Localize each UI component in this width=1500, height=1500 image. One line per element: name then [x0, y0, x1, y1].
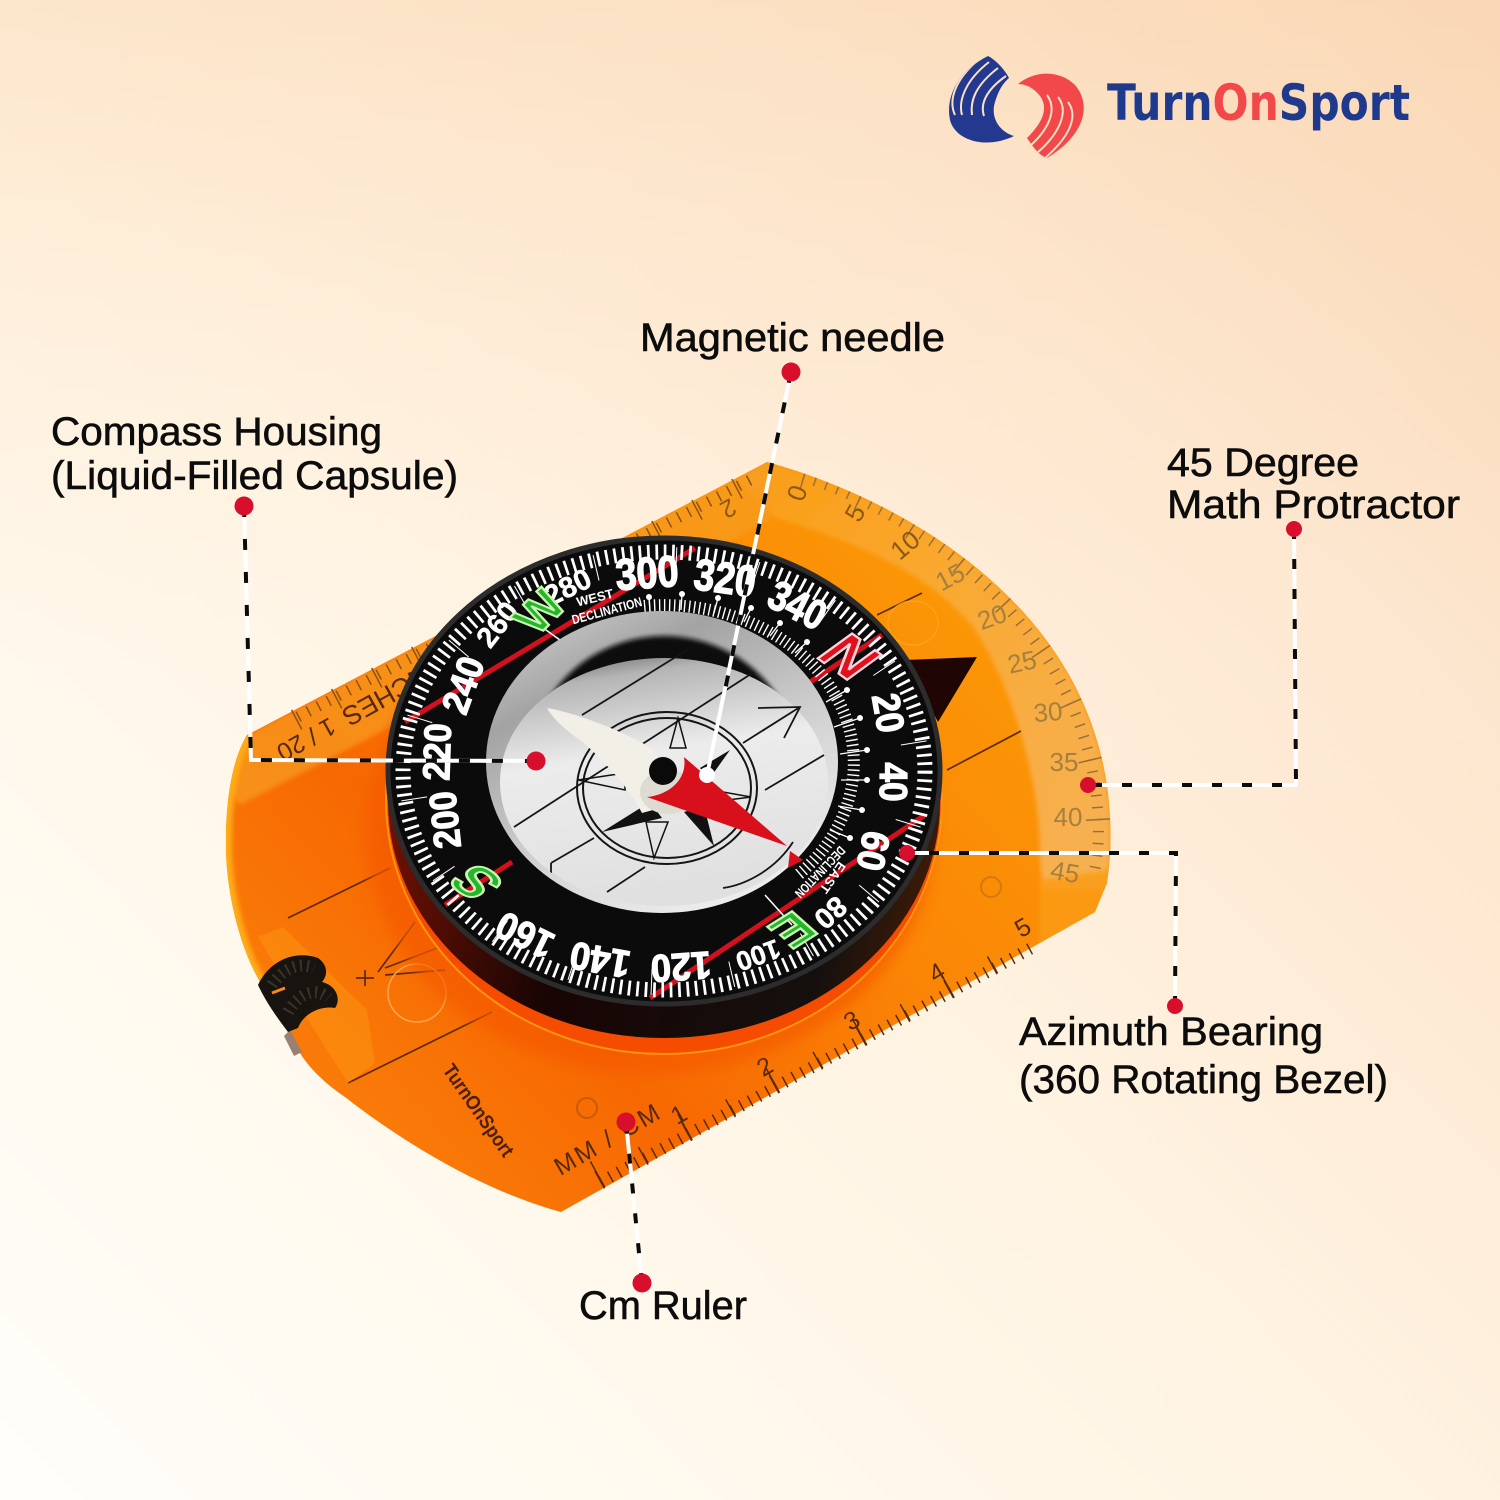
bezel degree numbers: 80	[807, 889, 853, 935]
cm ruler: 3	[839, 1005, 865, 1037]
bezel degree numbers: 20	[863, 690, 913, 736]
label: compass housing: Compass Housing	[51, 410, 382, 454]
label: 45 degree protractor: 45 Degree	[1167, 441, 1359, 485]
capsule dial face	[500, 658, 828, 906]
label: azimuth bearing: Azimuth Bearing	[1019, 1010, 1323, 1054]
inches scale: 1 / 20	[272, 712, 340, 766]
needle south end	[547, 708, 690, 813]
logo wordmark: TurnOnSport	[1107, 74, 1410, 132]
cm ruler: 4	[924, 957, 950, 989]
bezel degree numbers: 40	[872, 762, 914, 802]
plate moulded circles	[388, 601, 1001, 1118]
cm ruler: 2	[752, 1051, 778, 1083]
degree ticks	[403, 552, 925, 990]
protractor degree labels: 40	[1054, 802, 1082, 832]
bezel degree numbers: 160	[489, 903, 561, 967]
plate body	[226, 462, 1111, 1212]
bezel degree numbers: 320	[691, 549, 759, 607]
capsule glow on plate	[365, 585, 935, 1075]
cm ruler: 1	[666, 1099, 692, 1131]
direction arrow	[905, 657, 977, 722]
protractor ticks	[803, 477, 1098, 877]
cardinal letters: N	[803, 624, 895, 690]
protractor degree labels: 15	[930, 557, 970, 597]
bezel degree numbers: 60	[848, 827, 898, 875]
cardinal letters: W	[502, 581, 578, 643]
callout line: magnetic needle	[707, 372, 791, 775]
compass base plate	[220, 462, 1111, 1212]
red north-south lines	[405, 548, 925, 998]
transparent capsule rim	[486, 611, 838, 913]
plate tint bands	[220, 462, 1111, 985]
logo mark	[949, 56, 1084, 158]
label: azimuth bearing	[1019, 1010, 1388, 1102]
bezel degree numbers: 120	[649, 943, 713, 991]
cm ruler	[549, 912, 1037, 1182]
cardinal letters: E	[758, 902, 828, 958]
bezel degree numbers: 280	[539, 563, 597, 613]
protractor degree labels: 20	[973, 598, 1011, 636]
cardinal letters: S	[435, 856, 517, 908]
label: azimuth bearing: (360 Rotating Bezel)	[1019, 1058, 1388, 1102]
protractor degree labels: 10	[884, 524, 926, 566]
declination labels: DECLINATION	[570, 594, 644, 627]
needle pivot	[649, 757, 677, 785]
bezel degree numbers: 240	[433, 651, 493, 719]
bezel degree numbers: 100	[732, 933, 784, 977]
rotating compass capsule	[365, 538, 942, 1075]
red index mark	[788, 851, 803, 868]
declination labels: EAST	[817, 859, 849, 896]
cardinal letters	[435, 581, 895, 958]
protractor degree labels	[780, 481, 1082, 889]
protractor degree labels: 35	[1050, 747, 1078, 777]
bezel degree numbers: 300	[614, 546, 680, 600]
inches scale	[272, 480, 750, 766]
label: 45 degree protractor: Math Protractor	[1167, 483, 1460, 527]
protractor degree labels: 0	[780, 481, 814, 505]
lanyard cord	[258, 955, 338, 1056]
white index lines	[532, 620, 792, 925]
cm ruler: MM / CM	[549, 1099, 665, 1181]
bezel degree numbers: 140	[567, 933, 633, 987]
inches scale: 2	[715, 492, 741, 524]
protractor degree labels: 45	[1048, 855, 1082, 889]
inches scale: INCHES	[337, 656, 441, 732]
plate brand text: TurnOnSport	[438, 1060, 518, 1162]
lanyard slot	[258, 927, 375, 1083]
bezel degree numbers: 220	[415, 723, 459, 781]
needle pivot disc	[640, 770, 696, 814]
orange capsule base	[386, 546, 942, 1054]
bezel degree numbers: 340	[760, 572, 834, 640]
protractor degree labels: 25	[1005, 644, 1039, 680]
bezel degree numbers: 200	[421, 789, 469, 851]
capsule inner dark rim	[532, 636, 796, 884]
label: cm ruler: Cm Ruler	[579, 1284, 747, 1328]
plate engraved lines	[288, 593, 1021, 1083]
callout line: azimuth	[907, 853, 1176, 1006]
declination scale	[644, 591, 870, 875]
declination labels: WEST	[575, 586, 615, 609]
declination labels: DECLINATION	[792, 843, 849, 901]
label: 45 degree protractor	[1167, 441, 1460, 527]
bezel degree numbers	[415, 546, 914, 991]
bezel face	[388, 538, 940, 1004]
needle north end	[647, 757, 787, 846]
protractor degree labels: 5	[838, 499, 872, 527]
label: compass housing: (Liquid-Filled Capsule)	[51, 454, 458, 498]
cm ruler: 5	[1010, 912, 1036, 944]
callout lines	[244, 372, 1296, 1283]
compass needle	[547, 708, 787, 846]
label: magnetic needle: Magnetic needle	[640, 316, 945, 360]
compass rose	[577, 712, 757, 864]
dial orienting lines	[514, 650, 824, 895]
callout line: protractor	[1088, 529, 1296, 785]
bezel side wall	[388, 566, 940, 1038]
callout line: cm ruler	[626, 1122, 642, 1283]
label: compass housing	[51, 410, 458, 498]
callout dots	[234, 362, 1302, 1292]
callout line: compass housing	[244, 506, 536, 761]
logo	[949, 56, 1410, 158]
protractor degree labels: 30	[1032, 696, 1064, 728]
declination labels	[570, 586, 849, 901]
bezel degree numbers: 260	[470, 596, 526, 654]
